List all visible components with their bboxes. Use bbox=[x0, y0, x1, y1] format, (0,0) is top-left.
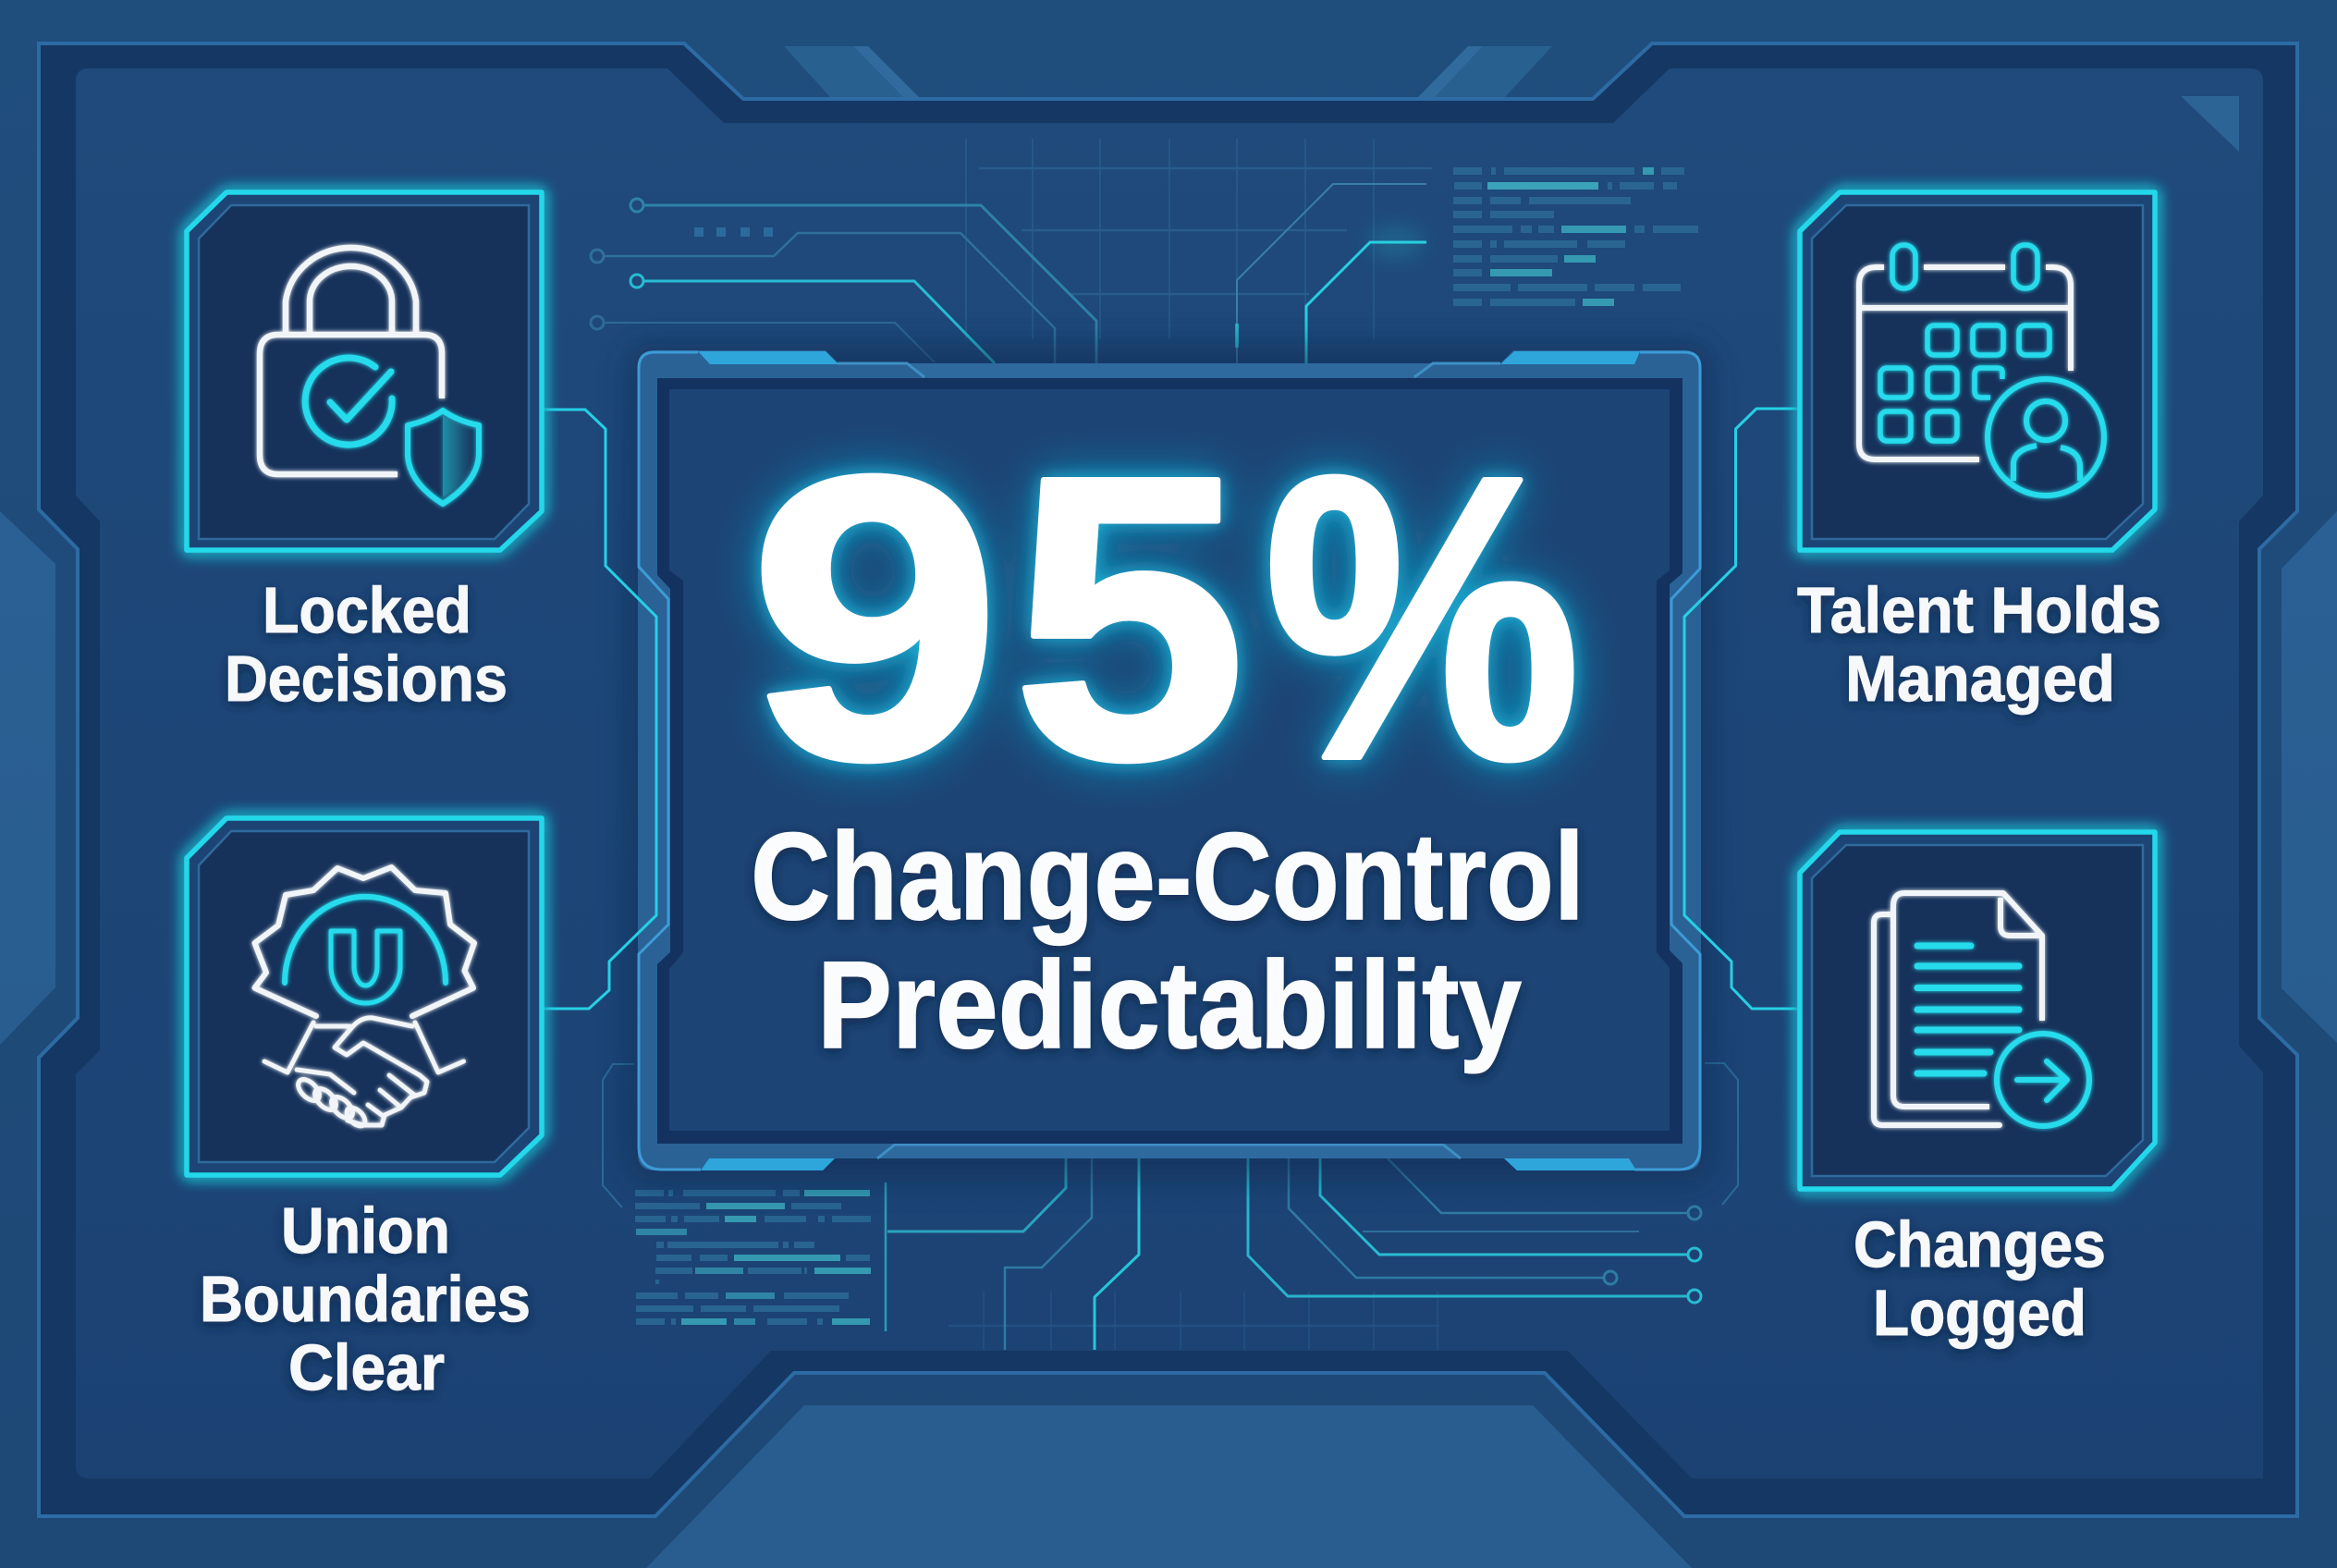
card inner bbox=[1812, 845, 2143, 1176]
icon: calendar with person bbox=[1859, 245, 2104, 496]
right side light plate bbox=[2282, 511, 2337, 1043]
subtitle: Change-Control bbox=[751, 808, 1585, 946]
label bbox=[1854, 1208, 2106, 1349]
label: Union bbox=[281, 1194, 450, 1267]
circuit traces: top bbox=[591, 184, 1426, 363]
label: Decisions bbox=[225, 643, 508, 715]
card body bbox=[1800, 832, 2155, 1189]
icon: padlock with check and shield bbox=[260, 248, 479, 504]
card: Locked Decisions bbox=[187, 192, 542, 715]
code block: bottom left bbox=[635, 1190, 871, 1325]
faint circuit grid: top bbox=[966, 139, 1432, 339]
circuit traces: bottom bbox=[886, 1158, 1701, 1350]
label: Managed bbox=[1845, 643, 2115, 715]
label: Boundaries bbox=[200, 1263, 531, 1335]
card: Union Boundaries Clear bbox=[187, 818, 542, 1403]
frame body bbox=[638, 350, 1701, 1170]
subtitle: Predictability bbox=[817, 937, 1522, 1074]
icon: document log with arrow bbox=[1874, 893, 2089, 1126]
label: Locked bbox=[263, 574, 471, 646]
big number: % bbox=[1264, 393, 1581, 843]
frame inner panel bbox=[669, 389, 1670, 1131]
faint circuit grid: bottom bbox=[948, 1292, 1439, 1350]
connector traces to cards bbox=[543, 409, 1797, 1009]
subtitle bbox=[751, 808, 1585, 1074]
label: Changes bbox=[1854, 1208, 2106, 1280]
label bbox=[200, 1194, 531, 1403]
frame inner dark band bbox=[657, 378, 1682, 1144]
card: Talent Holds Managed bbox=[1797, 192, 2161, 715]
icon: union seal with handshake bbox=[255, 867, 474, 1129]
small status squares bbox=[694, 227, 773, 237]
raised frame strips bbox=[838, 363, 1500, 1158]
center stat panel bbox=[638, 350, 1701, 1170]
big number: 5 bbox=[1012, 393, 1246, 843]
card body bbox=[187, 192, 542, 550]
triangle corner accent bbox=[2181, 96, 2239, 152]
top accent parallelograms bbox=[784, 46, 1552, 97]
label bbox=[1797, 574, 2161, 715]
card inner bbox=[199, 205, 529, 539]
bottom center light plate bbox=[646, 1405, 1692, 1568]
left side light plate bbox=[0, 511, 55, 1045]
frame bright edge bbox=[639, 352, 1700, 1170]
faint side brackets bbox=[603, 1063, 1738, 1207]
card body bbox=[1800, 192, 2155, 550]
card: Changes Logged bbox=[1800, 832, 2155, 1349]
card inner bbox=[199, 831, 529, 1162]
big number: 9 bbox=[749, 393, 1001, 843]
center frame shadow bbox=[629, 344, 1710, 1181]
label: Clear bbox=[288, 1331, 445, 1403]
glow spots on traces bbox=[1235, 227, 1424, 348]
label: Logged bbox=[1873, 1277, 2086, 1349]
card body bbox=[187, 818, 542, 1175]
code block: top right bbox=[1453, 167, 1698, 306]
label bbox=[225, 574, 508, 715]
card inner bbox=[1812, 205, 2143, 539]
frame bright tabs bbox=[698, 351, 1640, 1170]
label: Talent Holds bbox=[1797, 574, 2161, 646]
